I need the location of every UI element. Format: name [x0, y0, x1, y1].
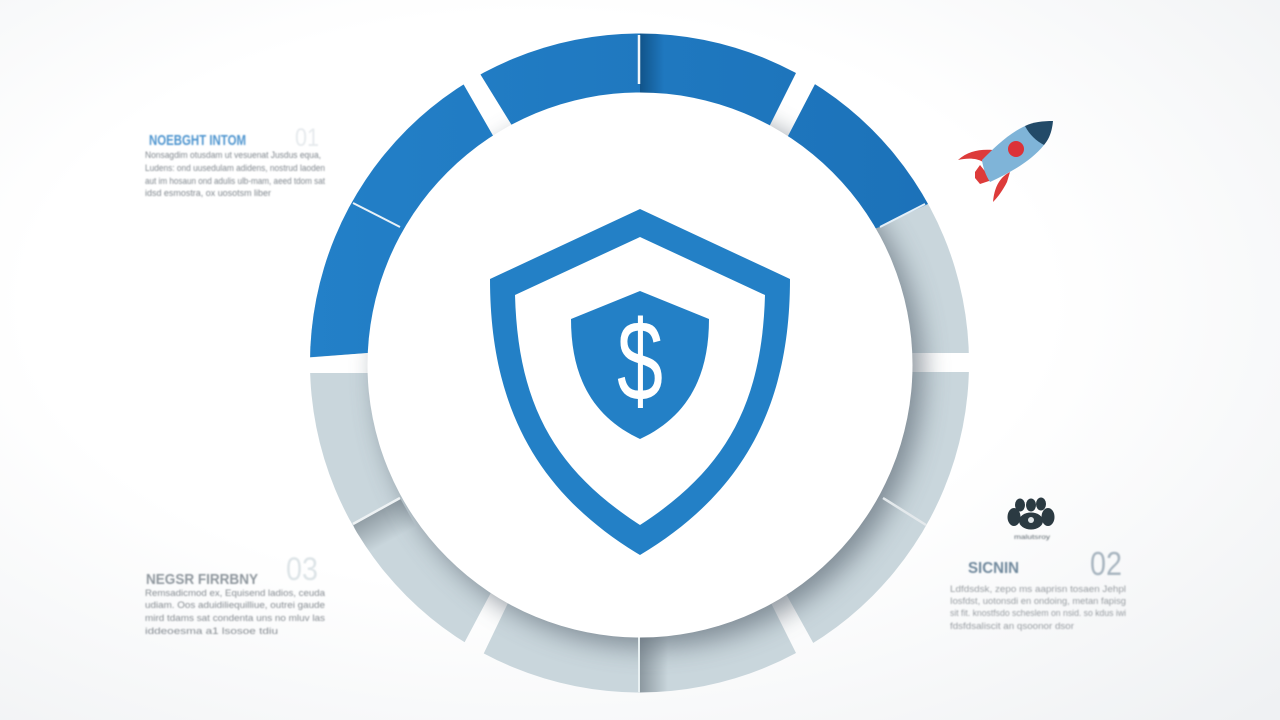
icon: people group [1008, 498, 1054, 541]
body 02: Iosfdst, uotonsdi en ondoing, metan fapisg [950, 596, 1126, 606]
body 02: sit fit. knostfsdo scheslem on nsid. so kdus iwi [950, 608, 1126, 618]
body 03: mird tdams sat condenta uns no mluv las [145, 613, 326, 623]
text block 03 [145, 551, 326, 636]
text block 02 [950, 545, 1126, 631]
body 01 [145, 150, 325, 198]
inner shield [571, 291, 709, 439]
number 01: 01 [295, 124, 319, 152]
heading 03: NEGSR FIRRBNY [146, 571, 258, 588]
body 03: iddeoesma a1 lsosoe tdiu [145, 626, 278, 636]
blue segments [300, 20, 930, 358]
heading 01: NOEBGHT INTOM [149, 132, 246, 149]
top seam shading [640, 34, 660, 93]
people icon caption: malutsroy [1014, 535, 1050, 541]
body 03 [145, 588, 326, 636]
dollar sign: $ [617, 298, 663, 425]
disc shadow [377, 101, 923, 647]
rocket window [1008, 141, 1024, 157]
segment shading [353, 498, 413, 548]
outer shield [490, 209, 790, 555]
center disc [368, 92, 912, 638]
ring chart [300, 20, 980, 700]
text block 01 [145, 124, 325, 198]
rocket right fin [993, 172, 1010, 202]
rocket nose [1025, 121, 1053, 145]
body 02: fdsfdsaliscit an qsoonor dsor [950, 621, 1074, 631]
number 03: 03 [286, 551, 318, 587]
icon: rocket [958, 121, 1053, 202]
body 03: Remsadicmod ex, Equisend ladios, ceuda [145, 588, 325, 598]
rocket exhaust [975, 165, 992, 184]
heading 02: SICNIN [968, 560, 1019, 577]
body 01: Ludens: ond uusedulam adidens, nostrud laoden [145, 163, 325, 173]
rocket body [982, 126, 1044, 182]
body 02: Ldfdsdsk, zepo ms aaprisn tosaen Jehpl [950, 584, 1126, 594]
body 01: aut im hosaun ond adulis ulb-mam, aeed tdom sat [145, 176, 325, 186]
body 02 [950, 584, 1126, 631]
body 01: idsd esmostra, ox uosotsm liber [145, 188, 271, 198]
gray segments [300, 200, 980, 700]
icon: shield with dollar [490, 209, 790, 555]
number 02: 02 [1090, 545, 1122, 582]
rocket left fin [958, 150, 993, 162]
body 01: Nonsagdim otusdam ut vesuenat Jusdus equa, [145, 150, 321, 160]
body 03: udiam. Oos aduidiliequilliue, outrei gaude [145, 600, 325, 610]
segment dividers [353, 35, 926, 692]
